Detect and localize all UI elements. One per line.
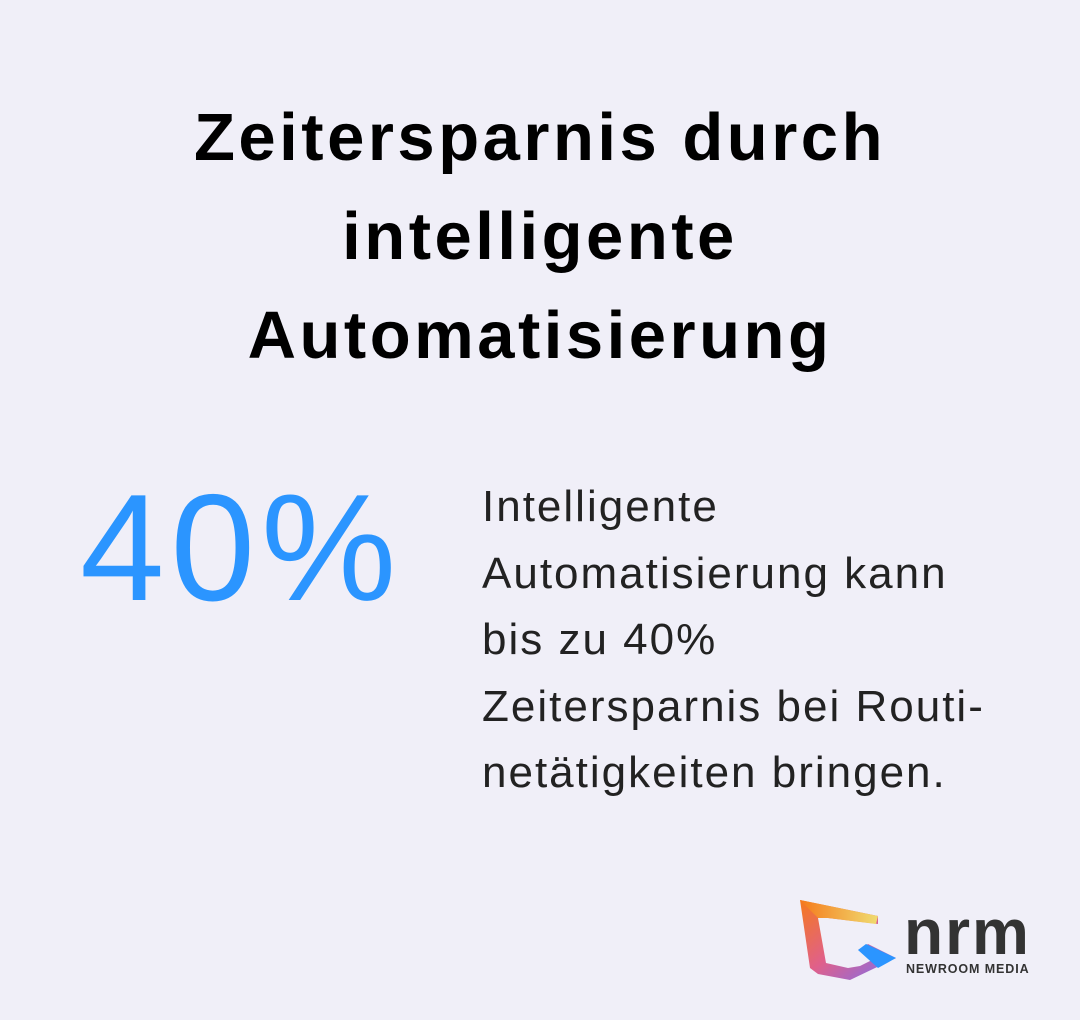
logo: nrm newroom media: NEWROOM MEDIA: [906, 962, 1030, 976]
title: [194, 100, 886, 373]
description text: netätigkeiten bringen.: [482, 748, 947, 797]
description text: Automatisierung kann: [482, 548, 948, 598]
description text: Zeitersparnis bei Routi-: [482, 682, 985, 730]
title: intelligente: [342, 199, 738, 274]
title: Automatisierung: [248, 298, 832, 373]
description text: Intelligente: [482, 482, 719, 531]
big stat: 40%: [80, 463, 402, 633]
description text: [482, 482, 985, 797]
description text: bis zu 40%: [482, 615, 717, 664]
logo: nrm newroom media: [800, 898, 1031, 980]
logo: nrm newroom media: nrm: [904, 898, 1031, 968]
title: Zeitersparnis durch: [194, 100, 886, 175]
